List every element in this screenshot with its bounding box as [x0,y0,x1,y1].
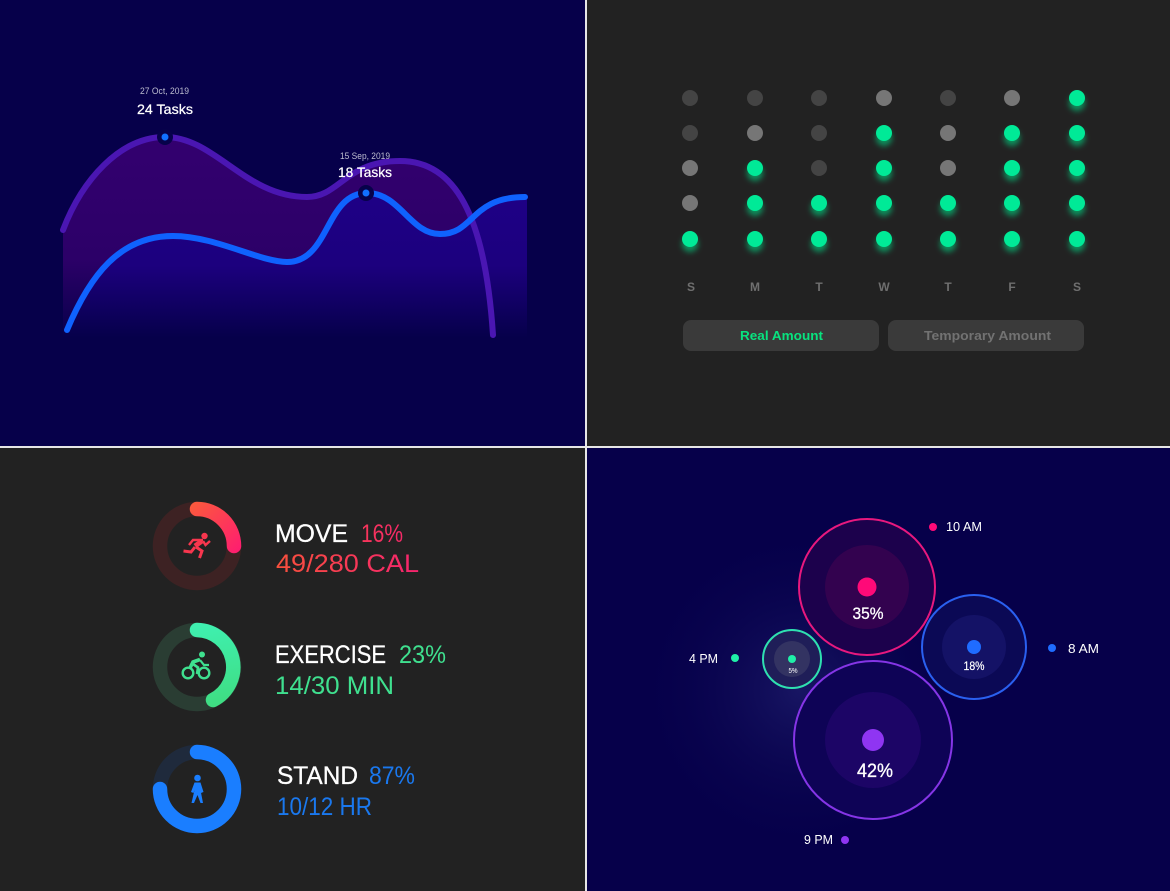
ring: move [160,509,234,583]
text: move stats: MOVE [275,520,348,548]
text: move stats [275,520,419,578]
panel: activity rings [0,448,585,891]
weekday labels: S [1073,280,1081,294]
blue line [67,193,525,330]
bubble: 18 percent: 18% [964,659,985,673]
bubble: 42 percent: 42% [857,761,893,782]
legend: 4 PM: 4 PM [689,652,718,666]
text: move stats: 49/280 CAL [276,550,419,578]
text: stand stats: STAND [277,762,358,790]
inactive dots [682,90,956,176]
legend: 10 AM: 10 AM [946,520,982,534]
bubble: 42 percent [794,661,952,819]
purple area fill [63,137,493,340]
weekday labels: F [1008,280,1016,294]
text: move stats: 16% [361,520,403,548]
icon: runner [184,533,210,558]
legend: 9 PM [804,833,849,847]
weekday labels: M [750,280,760,294]
marker: 15 Sep [358,185,374,201]
weekday labels [687,280,1081,294]
bubble: 5 percent: 5% [788,668,798,675]
weekday labels: S [687,280,695,294]
legend: 8 AM: 8 AM [1068,642,1099,656]
purple line [63,137,493,335]
label: 27 Oct tasks: 27 Oct, 2019 [140,86,189,96]
text: exercise stats: EXERCISE [275,641,386,669]
weekday labels: T [944,280,952,294]
bubble: 5 percent [763,630,821,688]
bubble: 35 percent: 35% [852,604,884,623]
panel: weekly dot matrix [587,0,1170,446]
active dots [682,90,1085,247]
text: exercise stats: 23% [399,641,446,669]
text: stand stats [277,762,415,821]
text: stand stats: 10/12 HR [277,793,372,821]
button: temporary amount [888,320,1084,351]
bubble: 18 percent [922,595,1026,699]
ring: stand [160,752,234,826]
panel: task area chart [0,0,585,446]
button: temporary amount: Temporary Amount [924,329,1052,343]
text: stand stats: 87% [369,762,415,790]
label: 15 Sep tasks: 18 Tasks [338,164,392,180]
label: 15 Sep tasks [338,151,392,180]
legend: 8 AM [1048,642,1099,656]
button: real amount: Real Amount [740,329,824,343]
weekday labels: T [815,280,823,294]
blue area fill [63,193,527,340]
label: 27 Oct tasks: 24 Tasks [137,101,193,117]
text: exercise stats [275,641,446,700]
bubble: 35 percent [799,519,935,655]
label: 27 Oct tasks [137,86,193,117]
icon: standing person [191,775,204,803]
legend: 9 PM: 9 PM [804,833,833,847]
button: real amount [683,320,879,351]
weekday labels: W [878,280,890,294]
icon: cyclist [183,652,209,678]
panel: hourly bubbles [587,448,1170,891]
temporary dots [682,90,1020,211]
legend: 10 AM [929,520,982,534]
text: exercise stats: 14/30 MIN [275,672,394,700]
legend: 4 PM [689,652,739,666]
ring: exercise [160,630,234,704]
marker: 27 Oct [157,129,173,145]
label: 15 Sep tasks: 15 Sep, 2019 [340,151,390,161]
